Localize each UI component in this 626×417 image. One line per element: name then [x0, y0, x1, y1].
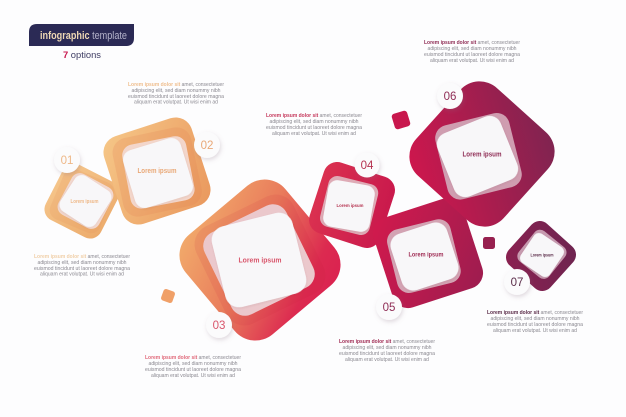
- badge 05: [376, 294, 402, 320]
- shape 06: [399, 71, 565, 237]
- shape labels: Lorem ipsum: [238, 256, 282, 264]
- text block 06: aliquam erat volutpat. Ut wisi enim ad: [430, 58, 514, 64]
- text block 04: aliquam erat volutpat. Ut wisi enim ad: [272, 131, 356, 137]
- shape 07: [501, 216, 581, 296]
- badge 07: 07: [511, 277, 523, 289]
- text block 05: Lorem ipsum dolor sit amet, consectetuer: [339, 339, 435, 345]
- text block 04: [266, 113, 362, 137]
- text block 01: euismod tincidunt ut laoreet dolore magna: [34, 266, 130, 272]
- badge 03: [206, 312, 232, 338]
- shape 04 inner panel: [317, 173, 381, 238]
- badge 06: 06: [444, 91, 456, 103]
- text block 05: [339, 339, 435, 363]
- text block 02: euismod tincidunt ut laoreet dolore magna: [128, 94, 224, 100]
- shape 05: [369, 194, 487, 312]
- text block 01: [34, 254, 130, 278]
- shape labels: Lorem ipsum: [336, 203, 364, 209]
- badge 04: 04: [361, 160, 374, 172]
- badge 01: 01: [61, 155, 73, 167]
- subtitle: 7 options: 7 options: [63, 50, 101, 61]
- shape labels: Lorem ipsum: [408, 252, 444, 258]
- text block 03: euismod tincidunt ut laoreet dolore magna: [145, 367, 241, 373]
- text block 04: adipiscing elit, sed diam nonummy nibh: [270, 119, 359, 125]
- decorative square: crimson: [391, 110, 411, 130]
- badge 04: [354, 152, 380, 178]
- shape labels: Lorem ipsum: [462, 152, 502, 158]
- badge 05: 05: [383, 302, 395, 314]
- shape 06 inner panel: [423, 100, 534, 212]
- shape 04: [305, 158, 399, 252]
- badge 07: [504, 269, 530, 295]
- text block 03: adipiscing elit, sed diam nonummy nibh: [148, 361, 238, 367]
- text block 01: adipiscing elit, sed diam nonummy nibh: [38, 260, 127, 266]
- title badge: infographic template: [40, 30, 127, 42]
- shape 03 inner panel: [198, 199, 320, 321]
- text block 02: Lorem ipsum dolor sit amet, consectetuer: [128, 82, 224, 88]
- badge 02: [194, 132, 220, 158]
- text block 02: [128, 82, 224, 106]
- shape labels: Lorem ipsum: [70, 199, 99, 205]
- text block 05: aliquam erat volutpat. Ut wisi enim ad: [345, 357, 429, 363]
- shape labels: Lorem ipsum: [530, 252, 554, 258]
- shape labels: Lorem ipsum: [138, 168, 176, 175]
- text block 06: [424, 40, 520, 64]
- shape 02: [99, 113, 215, 229]
- shape 03: [168, 168, 352, 352]
- title badge: [29, 24, 134, 46]
- decorative square: orange: [160, 288, 176, 304]
- text block 05: adipiscing elit, sed diam nonummy nibh: [342, 345, 432, 351]
- text block 07: Lorem ipsum dolor sit amet, consectetuer: [487, 310, 583, 316]
- text block 01: aliquam erat volutpat. Ut wisi enim ad: [40, 272, 124, 278]
- badge 06: [437, 83, 463, 109]
- text block 07: adipiscing elit, sed diam nonummy nibh: [490, 316, 580, 322]
- text block 07: [487, 310, 583, 334]
- text block 03: aliquam erat volutpat. Ut wisi enim ad: [151, 373, 235, 379]
- shape 02 inner panel: [114, 128, 203, 217]
- text block 04: euismod tincidunt ut laoreet dolore magna: [266, 125, 362, 131]
- shape 07 inner panel: [513, 225, 571, 284]
- decorative square: plum: [483, 237, 495, 249]
- badge 03: 03: [213, 320, 225, 332]
- text block 02: adipiscing elit, sed diam nonummy nibh: [132, 88, 221, 94]
- text block 07: aliquam erat volutpat. Ut wisi enim ad: [493, 328, 577, 334]
- text block 01: Lorem ipsum dolor sit amet, consectetuer: [34, 254, 130, 260]
- text block 07: euismod tincidunt ut laoreet dolore magna: [487, 322, 583, 328]
- text block 03: [145, 355, 241, 379]
- text block 03: Lorem ipsum dolor sit amet, consectetuer: [145, 355, 241, 361]
- text block 06: Lorem ipsum dolor sit amet, consectetuer: [424, 40, 520, 46]
- shape labels: [70, 152, 554, 264]
- shape 01: [40, 159, 124, 243]
- text block 05: euismod tincidunt ut laoreet dolore magna: [339, 351, 435, 357]
- badge 01: [54, 147, 80, 173]
- shape 05 inner panel: [380, 212, 468, 300]
- badge 02: 02: [201, 140, 213, 152]
- text block 06: adipiscing elit, sed diam nonummy nibh: [428, 46, 517, 52]
- text block 04: Lorem ipsum dolor sit amet, consectetuer: [266, 113, 362, 119]
- text block 06: euismod tincidunt ut laoreet dolore magna: [424, 52, 520, 58]
- text block 02: aliquam erat volutpat. Ut wisi enim ad: [134, 100, 218, 106]
- shape 01 inner panel: [51, 167, 120, 235]
